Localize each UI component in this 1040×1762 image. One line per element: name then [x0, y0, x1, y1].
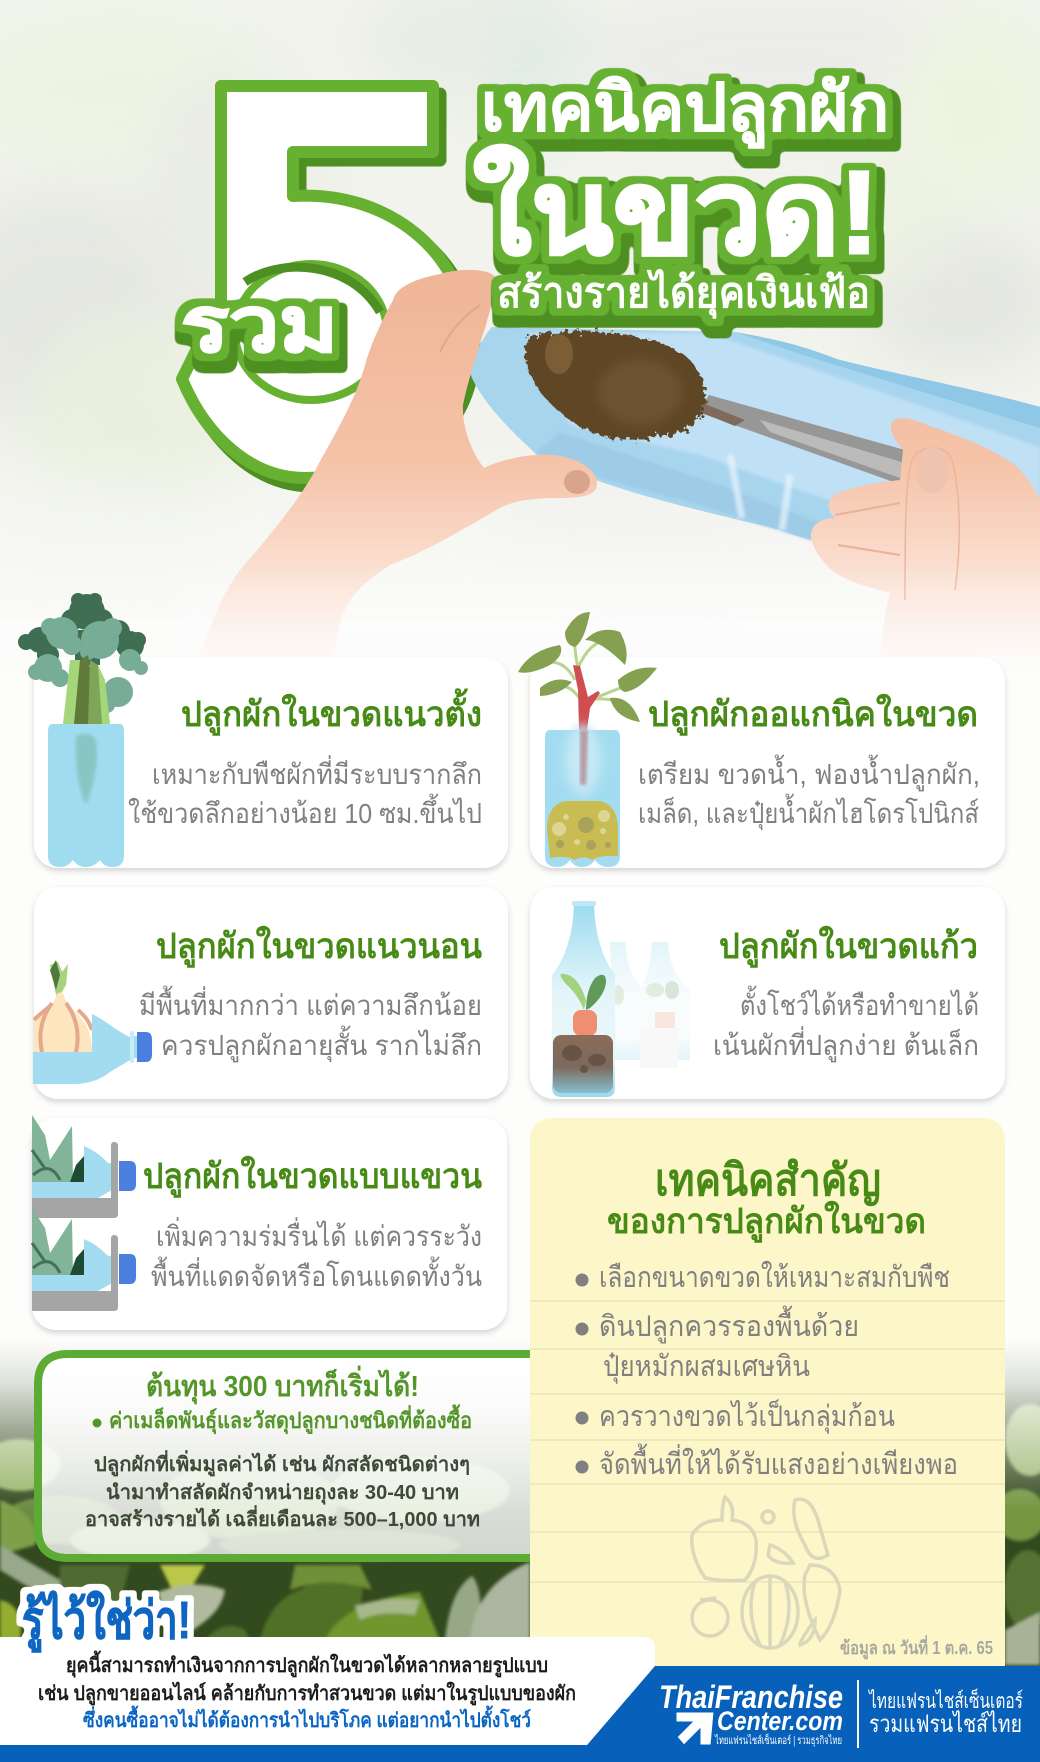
heading: รู้ไว้ใช่ว่า! [22, 1590, 191, 1653]
cost heading: ต้นทุน 300 บาทก็เริ่มได้! [146, 1365, 419, 1404]
body text [151, 1217, 482, 1292]
cost bullet: ค่าเมล็ดพันธุ์และวัสดุปลูกบางชนิดที่ต้องซื้อ [109, 1404, 472, 1435]
body text [139, 985, 482, 1063]
heading: ปลูกผักในขวดแนวตั้ง [181, 688, 482, 736]
body text: เพิ่มความร่มรื่นได้ แต่ควรระวัง [156, 1217, 482, 1252]
panel: horizontal bottle [33, 887, 508, 1099]
logo: Center.com [717, 1706, 843, 1736]
body text: เมล็ด, และปุ๋ยน้ำผักไฮโดรโปนิกส์ [638, 793, 979, 831]
text: เช่น ปลูกขายออนไลน์ คล้ายกับการทำสวนขวด แต่มาในรูปแบบของผัก [38, 1681, 576, 1707]
body text: ตั้งโชว์ได้หรือทำขายได้ [740, 985, 979, 1021]
text [38, 1650, 576, 1732]
bottle [435, 307, 1040, 575]
body text: ใช้ขวดลึกอย่างน้อย 10 ซม.ขึ้นไป [128, 793, 482, 829]
cost text: อาจสร้างรายได้ เฉลี่ยเดือนละ 500–1,000 บาท [85, 1504, 480, 1531]
icon: carrot in glass bottle [552, 901, 690, 1097]
icon: arrow [676, 1712, 714, 1745]
cost text [85, 1449, 480, 1531]
title line 3: สร้างรายได้ยุคเงินเฟ้อ [497, 268, 870, 319]
body text: ควรปลูกผักอายุสั้น รากไม่ลึก [161, 1025, 482, 1063]
panel: glass bottle [530, 887, 1005, 1099]
heading: ปลูกผักออแกนิคในขวด [648, 693, 978, 736]
body text [713, 985, 979, 1063]
big number 5 [182, 86, 474, 486]
body text: เตรียม ขวดน้ำ, ฟองน้ำปลูกผัก, [638, 754, 980, 792]
footer text [868, 1687, 1023, 1738]
technique list: ดินปลูกควรรองพื้นด้วย [599, 1305, 859, 1344]
body text: มีพื้นที่มากกว่า แต่ความลึกน้อย [139, 985, 482, 1021]
body text: พื้นที่แดดจัดหรือโดนแดดทั้งวัน [151, 1256, 482, 1292]
cost text: นำมาทำสลัดผักจำหน่ายถุงละ 30-40 บาท [106, 1482, 459, 1505]
left hand [200, 270, 597, 655]
technique list: จัดพื้นที่ให้ได้รับแสงอย่างเพียงพอ [599, 1443, 958, 1481]
heading: ปลูกผักในขวดแก้ว [719, 925, 978, 968]
technique list [576, 1260, 958, 1481]
bottom leaves photo [0, 1340, 1040, 1670]
text: ยุคนี้สามารถทำเงินจากการปลูกผักในขวดได้หลากหลายรูปแบบ [66, 1650, 548, 1679]
panel: hanging bottle [32, 1115, 507, 1330]
icon: seedling in bottle [518, 612, 657, 867]
title artwork [180, 70, 1040, 660]
technique list: เลือกขนาดขวดให้เหมาะสมกับพืช [599, 1260, 950, 1294]
panel: cost box [38, 1354, 534, 1558]
cost text: ปลูกผักที่เพิ่มมูลค่าได้ เช่น ผักสลัดชนิดต่างๆ [94, 1449, 470, 1478]
logo [659, 1679, 843, 1747]
heading: ปลูกผักในขวดแบบแขวน [143, 1155, 482, 1198]
body text [128, 755, 482, 829]
label รวม: รวม [181, 283, 338, 368]
logo: ThaiFranchise [659, 1679, 843, 1715]
icon: vegetable line art [692, 1497, 840, 1648]
title line 1: เทคนิคปลูกผัก [481, 70, 889, 149]
heading: ของการปลูกผักในขวด [607, 1200, 926, 1243]
spoon and soil [525, 331, 912, 485]
right hand [811, 418, 1040, 655]
heading: ปลูกผักในขวดแนวนอน [156, 925, 482, 968]
body text: เน้นผักที่ปลูกง่าย ต้นเล็ก [713, 1026, 979, 1063]
logo: ไทยแฟรนไชส์เซ็นเตอร์ | รวมธุรกิจไทย [714, 1733, 842, 1747]
panel: key techniques [530, 1118, 1005, 1670]
icon: celery in bottle [18, 593, 148, 867]
heading [607, 1156, 926, 1243]
body text: เหมาะกับพืชผักที่มีระบบรากลึก [152, 755, 482, 790]
title line 2: ในขวด! [473, 145, 879, 279]
source note: ข้อมูล ณ วันที่ 1 ต.ค. 65 [840, 1635, 993, 1660]
footer band [0, 1666, 1040, 1762]
heading: เทคนิคสำคัญ [655, 1156, 881, 1206]
panel: organic [518, 612, 1005, 868]
technique list: ควรวางขวดไว้เป็นกลุ่มก้อน [599, 1398, 895, 1434]
panel: vertical bottle [18, 593, 508, 868]
icon: onion in bottle [33, 960, 152, 1084]
body text [638, 754, 980, 831]
did you know bar [0, 1590, 655, 1745]
icon: hanging bottles [32, 1115, 136, 1311]
technique list: ปุ๋ยหมักผสมเศษหิน [603, 1351, 810, 1384]
text: ซึ่งคนซื้ออาจไม่ได้ต้องการนำไปบริโภค แต่อยากนำไปตั้งโชว์ [83, 1705, 531, 1732]
